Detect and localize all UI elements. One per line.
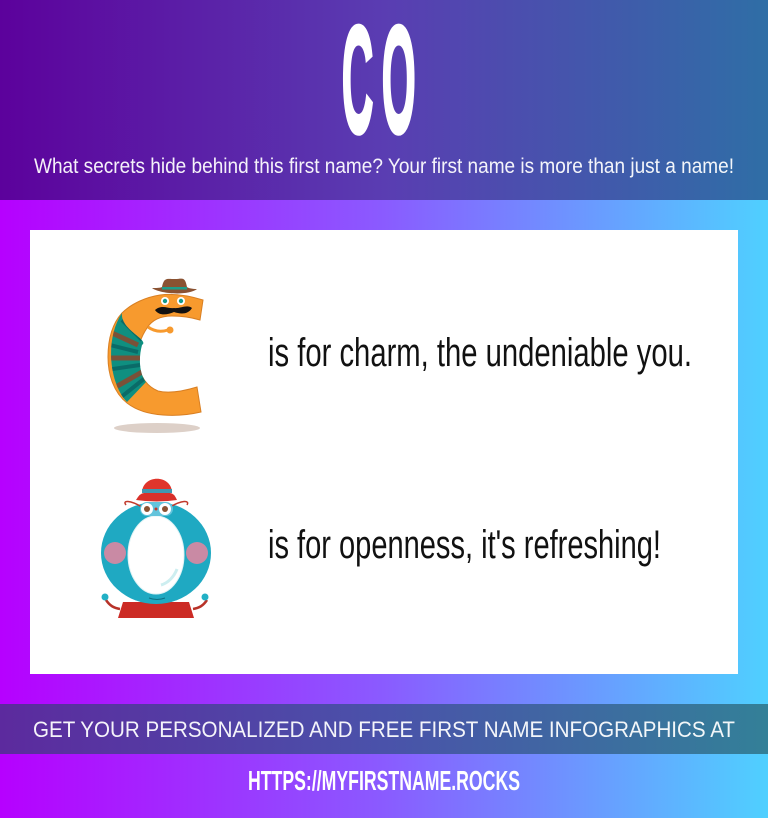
sweater stripes <box>111 313 146 402</box>
icon: letter O character <box>101 479 211 618</box>
footer url: HTTPS://MYFIRSTNAME.ROCKS <box>248 765 520 796</box>
arm <box>148 326 174 334</box>
icon: letter C character <box>100 279 203 433</box>
white content panel <box>30 230 738 674</box>
header band <box>0 0 768 200</box>
footer band <box>0 704 768 754</box>
